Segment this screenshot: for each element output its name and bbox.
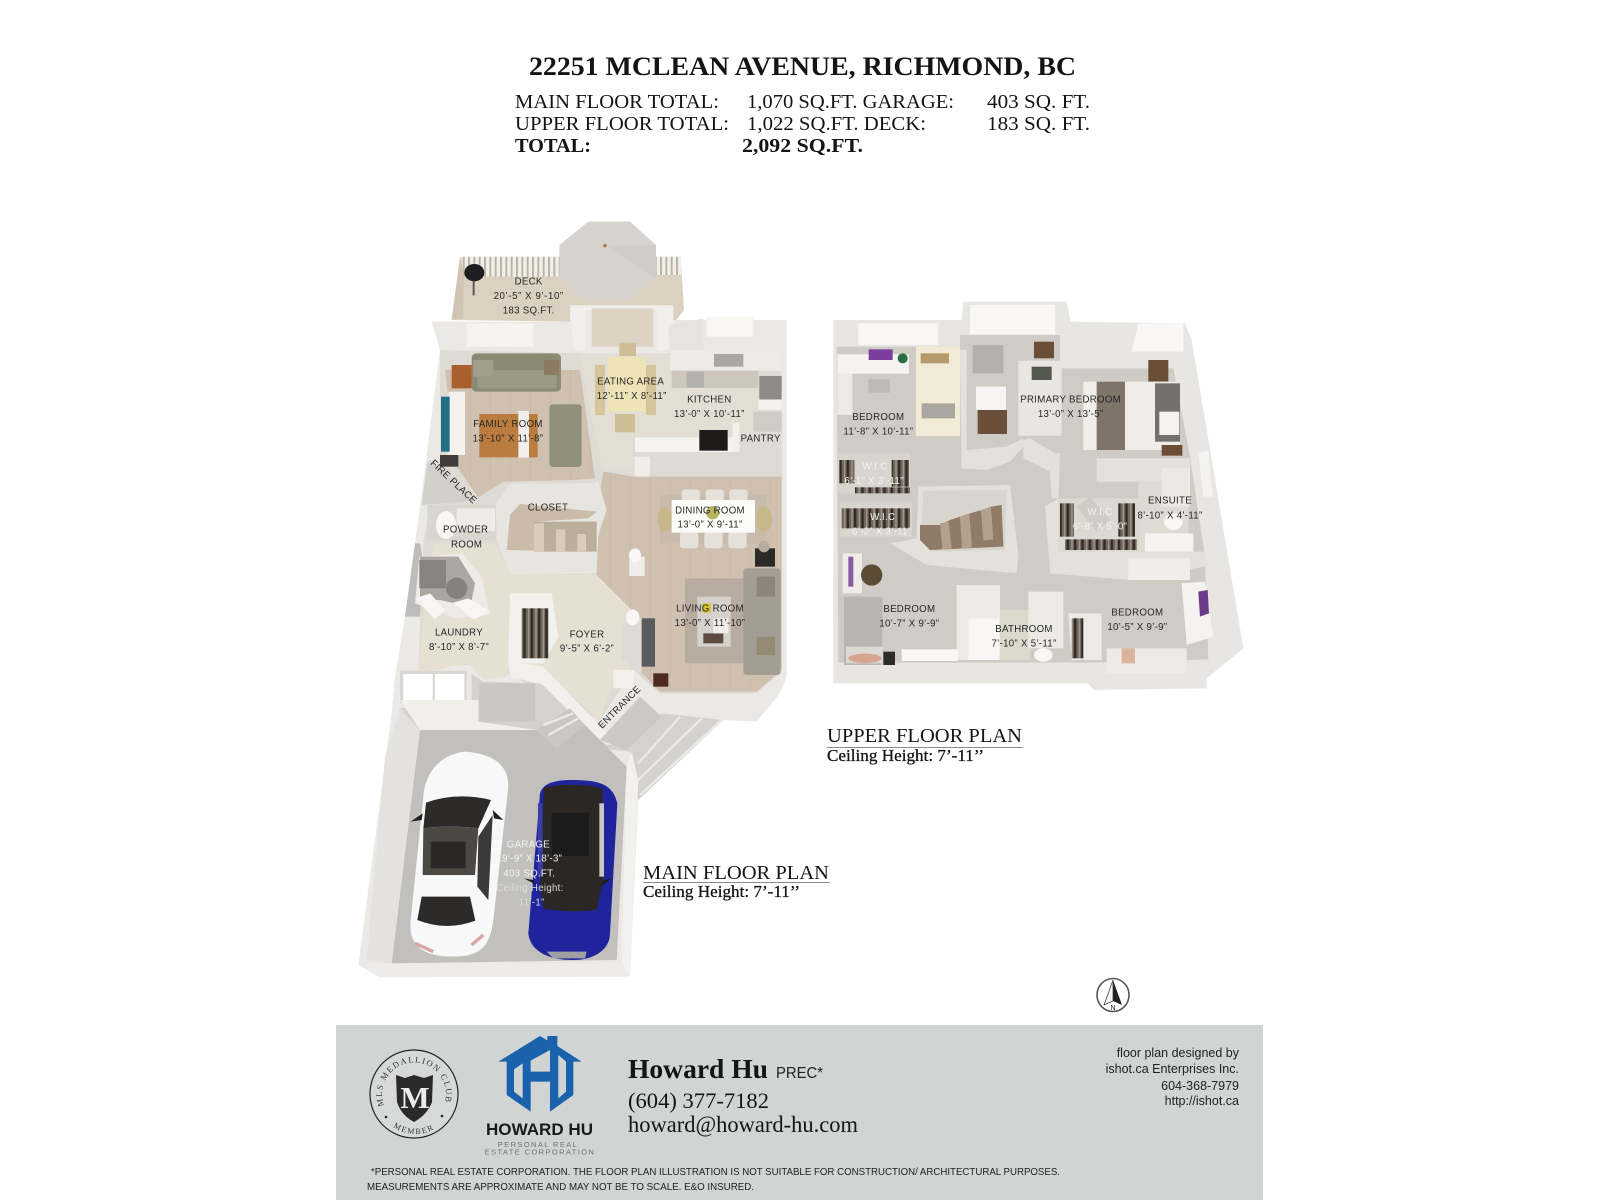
upper floor room labels: BEDROOM — [1111, 607, 1163, 618]
upper floor room labels: 7’-10” X 5’-11” — [992, 639, 1056, 650]
garage label — [496, 839, 564, 909]
walk-in closet left lower — [840, 502, 912, 537]
main floor room labels: 13’-10” X 11’-8” — [473, 433, 543, 444]
upper floor room labels: 6’-2” X 3’-11” — [852, 526, 911, 537]
powder room — [427, 505, 496, 540]
upper floor room labels: W.I.C — [862, 461, 888, 472]
upper floor room labels: 11’-8” X 10’-11” — [843, 426, 913, 437]
kitchen floor — [580, 353, 758, 472]
deck — [452, 257, 684, 322]
upper floor plan illustration — [833, 302, 1243, 690]
icon: patio umbrella — [559, 222, 656, 300]
main floor room labels: DECK — [515, 276, 543, 287]
foyer column and door — [613, 609, 639, 688]
main floor room labels: 20’-5” X 9’-10” — [494, 291, 564, 302]
upper floor room labels: BEDROOM — [852, 412, 904, 423]
main floor room labels: ENTRANCE — [596, 684, 644, 731]
family room floor — [445, 370, 595, 497]
front bedroom furniture — [837, 347, 960, 436]
upper floor room labels: 10’-5” X 9’-9” — [1107, 622, 1167, 633]
main floor room labels: KITCHEN — [687, 395, 732, 406]
garage label: Ceiling Height: — [496, 883, 564, 894]
area line: main floor: 1,070 SQ.FT. GARAGE: — [747, 91, 954, 113]
caption heading: MAIN FLOOR PLAN — [643, 862, 829, 884]
area line: total: TOTAL: — [515, 135, 591, 157]
garage label: GARAGE — [507, 839, 550, 850]
ceiling height: Ceiling Height: 7’-11’’ — [643, 882, 800, 901]
upper floor room labels: W.I.C — [870, 512, 895, 523]
logo tagline: PERSONAL REAL — [498, 1140, 578, 1149]
ensuite — [1138, 468, 1193, 552]
main floor plan illustration — [358, 222, 787, 977]
MLS medallion club badge: MLS MEDALLION CLUB — [376, 1056, 452, 1107]
area line: upper floor: 183 SQ. FT. — [987, 113, 1090, 135]
main floor room labels: ROOM — [451, 539, 482, 550]
ceiling height: Ceiling Height: 7’-11’’ — [827, 746, 984, 765]
bathroom fixtures — [957, 585, 1063, 662]
main floor room labels: LAUNDRY — [435, 628, 483, 639]
floor plan designer credit: floor plan designed by — [1117, 1046, 1240, 1060]
main floor room labels: DINING ROOM — [675, 506, 745, 517]
walk-in closet right — [1058, 497, 1138, 552]
disclaimer — [367, 1166, 1060, 1193]
main floor room labels: POWDER — [443, 525, 488, 536]
caption underline — [827, 747, 1023, 748]
area line: total — [515, 135, 863, 157]
main floor walls and slab — [358, 305, 787, 977]
entrance wall — [508, 662, 613, 740]
agent email: howard@howard-hu.com — [628, 1112, 858, 1137]
main floor room labels: PANTRY — [741, 434, 781, 445]
column — [629, 548, 645, 576]
garage walls — [358, 708, 638, 977]
agent designation: PREC* — [776, 1065, 823, 1082]
area line: main floor: 403 SQ. FT. — [987, 91, 1090, 113]
upper floor room labels: 6’-1” X 3’-11” — [844, 476, 904, 487]
agent name: Howard Hu — [628, 1054, 768, 1084]
dining and living floor — [597, 472, 782, 692]
Howard Hu house logo — [498, 1036, 582, 1112]
upper floor room labels: ENSUITE — [1148, 496, 1192, 507]
main floor room labels: 13’-0” X 11’-10” — [675, 618, 745, 629]
family room furniture — [440, 353, 582, 467]
icon: north compass — [1097, 978, 1129, 1012]
upper floor plan caption — [827, 725, 1023, 765]
main floor room labels: 13’-0” X 10’-11” — [674, 409, 745, 420]
footer band — [336, 1025, 1263, 1200]
primary bedroom furniture — [973, 342, 1182, 456]
main floor room labels: 12’-11” X 8’-11” — [597, 391, 667, 402]
garage label: 403 SQ.FT. — [503, 869, 555, 880]
upper floor room labels: W.I.C — [1087, 507, 1113, 518]
laundry appliances — [415, 553, 490, 619]
logo tagline second line: ESTATE CORPORATION — [485, 1148, 595, 1156]
title: 22251 MCLEAN AVENUE, RICHMOND, BC — [529, 52, 1076, 81]
main floor room labels: 13’-0” X 9’-11” — [678, 520, 742, 531]
foyer and laundry floor — [418, 543, 633, 720]
area line: upper floor: UPPER FLOOR TOTAL: — [515, 113, 729, 135]
main floor room labels: LIVING ROOM — [676, 604, 744, 615]
upper floor room labels — [843, 395, 1202, 650]
floor plan designer credit: http://ishot.ca — [1165, 1094, 1239, 1108]
MLS medallion club badge — [369, 1049, 459, 1139]
dining room table and chairs — [658, 489, 772, 548]
upper floor room labels: 8’-10” X 4’-11” — [1138, 510, 1202, 521]
header: address and area totals — [515, 52, 1090, 157]
upper floor room labels: 6’-8” X 5’-0” — [1073, 521, 1127, 532]
upper floor room labels: 13’-0” X 13’-5” — [1038, 409, 1104, 420]
upper floor walls and slab — [833, 302, 1243, 690]
entry steps and landing — [398, 673, 723, 800]
white car — [410, 752, 508, 957]
floor plan designer credit: 604-368-7979 — [1161, 1079, 1239, 1093]
right bedroom furniture — [1068, 582, 1213, 673]
upper floor room labels: PRIMARY BEDROOM — [1020, 395, 1121, 406]
logo wordmark: HOWARD HU — [486, 1121, 593, 1139]
main floor room labels: 9’-5” X 6’-2” — [560, 644, 614, 655]
disclaimer: *PERSONAL REAL ESTATE CORPORATION. THE FLOOR PLAN ILLUSTRATION IS NOT SUITABLE FOR CONSTRUCTION/ ARCHITECTURAL PURPOSES. — [371, 1166, 1060, 1178]
garage floor — [392, 725, 627, 963]
area line: upper floor: 1,022 SQ.FT. DECK: — [747, 113, 926, 135]
interior walls — [960, 350, 1205, 580]
foyer closet — [508, 593, 558, 663]
main floor room labels: EATING AREA — [597, 376, 664, 387]
floor plan designer credit — [1106, 1046, 1240, 1108]
walk-in closet left upper — [838, 453, 910, 493]
garage — [358, 673, 723, 977]
icon: north compass: N — [1110, 1005, 1116, 1012]
blue car — [524, 780, 617, 960]
kitchen cabinets and appliances — [635, 350, 782, 452]
living room furniture — [642, 541, 781, 687]
MLS medallion club badge: M — [400, 1080, 430, 1115]
upper floor room labels: BEDROOM — [883, 604, 935, 615]
area line: total: 2,092 SQ.FT. — [742, 135, 863, 157]
main floor room labels: FIRE PLACE — [428, 458, 479, 507]
left bedroom furniture — [843, 553, 958, 665]
area line: upper floor — [515, 113, 1090, 135]
area line: main floor — [515, 91, 1090, 113]
caption heading: UPPER FLOOR PLAN — [827, 725, 1022, 747]
main floor room labels: FOYER — [570, 629, 604, 640]
main floor room labels: FAMILY ROOM — [473, 419, 543, 430]
staircase — [890, 485, 1018, 573]
caption underline — [643, 882, 830, 883]
kitchen partition wall — [634, 453, 782, 485]
main floor room labels: CLOSET — [528, 503, 568, 514]
disclaimer: MEASUREMENTS ARE APPROXIMATE AND MAY NOT BE TO SCALE. E&O INSURED. — [367, 1181, 754, 1193]
floor plan designer credit: ishot.ca Enterprises Inc. — [1106, 1062, 1239, 1076]
stair and closet block — [496, 482, 607, 575]
garage label: 19’-9” X 18’-3” — [496, 854, 562, 865]
MLS medallion club badge: MEMBER — [393, 1122, 434, 1134]
area line: main floor: MAIN FLOOR TOTAL: — [515, 91, 719, 113]
main floor room labels: 8’-10” X 8’-7” — [429, 642, 489, 653]
garage label: 11’-1” — [519, 898, 545, 909]
upper floor room labels: 10’-7” X 9’-9” — [879, 618, 939, 629]
main floor plan caption — [643, 862, 830, 901]
main floor room labels — [428, 276, 781, 731]
main floor room labels: 183 SQ.FT. — [503, 305, 555, 316]
fire place wedge — [422, 460, 474, 505]
eating area table — [595, 343, 656, 432]
upper floor room labels: BATHROOM — [995, 624, 1053, 635]
agent phone: (604) 377-7182 — [628, 1088, 769, 1113]
storage boxes — [400, 671, 467, 703]
